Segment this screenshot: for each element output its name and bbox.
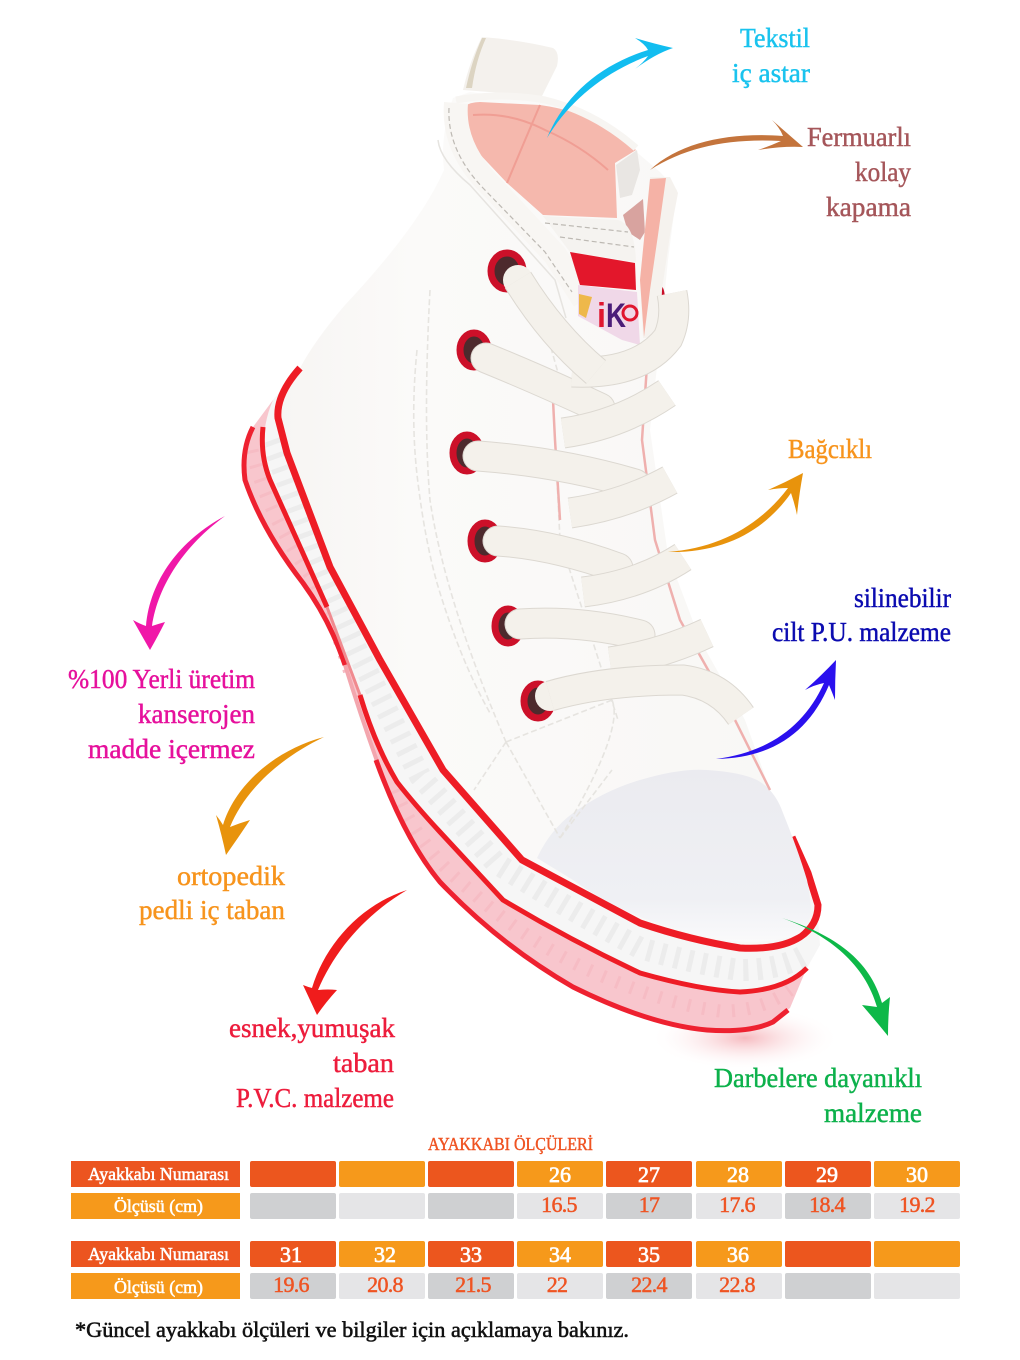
label: orthopedic	[139, 861, 286, 925]
tongue	[543, 216, 636, 262]
collar rim	[456, 96, 636, 148]
size cells first table: 30	[906, 1162, 928, 1187]
size cells second table: 34	[549, 1242, 571, 1267]
label: textile lining	[732, 23, 810, 88]
rear eyelet	[657, 286, 665, 314]
label: textile lining: Tekstil	[740, 23, 810, 53]
size cells second table: 22	[547, 1272, 567, 1297]
size cells first table: 29	[816, 1162, 838, 1187]
eyelets	[453, 253, 552, 718]
tongue stitches	[545, 223, 634, 247]
row labels: Ölçüsü (cm)	[114, 1196, 203, 1217]
collar stitches	[449, 108, 572, 292]
red foxing stripe	[278, 368, 818, 948]
label: flexible sole: P.V.C. malzeme	[236, 1083, 394, 1113]
tongue logo: K	[606, 297, 626, 335]
label: flexible sole	[229, 1013, 395, 1113]
arrow: insole orange	[216, 737, 324, 855]
arrow: lining cyan	[547, 38, 673, 138]
size cells first table: 19.2	[899, 1192, 935, 1217]
toe cap	[537, 770, 811, 942]
lining folds	[473, 105, 608, 183]
size cells first table	[250, 1161, 960, 1219]
size cells second table: 31	[280, 1242, 302, 1267]
row labels	[71, 1161, 240, 1299]
laces	[478, 265, 741, 716]
size cells second table: 20.8	[367, 1272, 404, 1297]
label: impact resistant: malzeme	[824, 1098, 922, 1128]
collar band	[456, 103, 584, 300]
zipper pull	[623, 199, 645, 240]
pull tab	[463, 37, 558, 96]
label: textile lining: iç astar	[732, 58, 810, 88]
label: impact resistant: Darbelere dayanıklı	[714, 1063, 922, 1093]
pink eyestay edge	[553, 350, 770, 790]
flap lining	[640, 178, 666, 337]
label: laces: Bağcıklı	[788, 434, 872, 464]
tongue logo: i	[597, 297, 606, 335]
size cells second table: 35	[638, 1242, 660, 1267]
table title: AYAKKABI ÖLÇÜLERİ	[428, 1134, 593, 1154]
size cells second table: 32	[374, 1242, 396, 1267]
zipper	[616, 150, 640, 198]
size cells first table: 26	[549, 1162, 571, 1187]
arrow: toe green	[782, 918, 890, 1036]
size cells second table: 22.4	[631, 1272, 668, 1297]
midsole ribs	[272, 440, 805, 970]
label: flexible sole: taban	[333, 1048, 395, 1078]
row labels: Ölçüsü (cm)	[114, 1277, 203, 1298]
size cells second table	[250, 1241, 960, 1299]
sole texture	[252, 450, 790, 1011]
outer sole red edge	[244, 427, 788, 1031]
arrow: PU blue	[716, 660, 836, 759]
size cells first table: 28	[727, 1162, 749, 1187]
label: local production: madde içermez	[88, 734, 255, 764]
label: local production: %100 Yerli üretim	[68, 664, 255, 694]
middle stripe pale part	[327, 607, 360, 695]
arrow: magenta	[133, 516, 225, 650]
size cells first table: 17	[639, 1192, 660, 1217]
pull tab fold	[466, 38, 486, 88]
label: PU material: silinebilir	[854, 583, 951, 613]
size table	[71, 1134, 960, 1299]
pink outer sole	[244, 400, 808, 1031]
tongue label	[578, 285, 640, 345]
size cells second table: 22.8	[719, 1272, 756, 1297]
seams	[414, 290, 618, 838]
size cells first table: 16.5	[541, 1192, 578, 1217]
row labels: Ayakkabı Numarası	[88, 1164, 229, 1184]
size cells first table: 17.6	[719, 1192, 756, 1217]
row labels: Ayakkabı Numarası	[88, 1244, 229, 1264]
outer sole pale edge	[345, 665, 382, 775]
white midsole	[263, 368, 820, 992]
size cells second table: 36	[727, 1242, 749, 1267]
size cells first table: 18.4	[809, 1192, 846, 1217]
label: impact resistant	[714, 1063, 922, 1128]
footnote: *Güncel ayakkabı ölçüleri ve bilgiler için açıklamaya bakınız.	[75, 1317, 629, 1342]
label: zipper: kolay	[855, 157, 911, 187]
label: PU material: cilt P.U. malzeme	[772, 617, 951, 647]
label: zipper: kapama	[826, 192, 911, 222]
middle red stripe	[262, 427, 807, 992]
label: local production	[68, 664, 255, 764]
size cells first table: 27	[638, 1162, 660, 1187]
size cells second table: 33	[460, 1242, 482, 1267]
label: PU material	[772, 583, 951, 647]
pink lining	[463, 102, 636, 218]
label: flexible sole: esnek,yumuşak	[229, 1013, 395, 1043]
collar edge	[438, 140, 566, 318]
tongue red band	[570, 252, 636, 290]
size cells second table: 21.5	[455, 1272, 492, 1297]
label: orthopedic: ortopedik	[177, 861, 286, 891]
arrow: laces orange	[668, 473, 803, 552]
label: orthopedic: pedli iç taban	[139, 895, 285, 925]
floor shadow	[650, 1006, 840, 1070]
shoe illustration	[244, 37, 840, 1070]
size cells second table: 19.6	[273, 1272, 310, 1297]
arrow: zipper brown	[650, 120, 803, 170]
zipper flap	[640, 177, 678, 338]
arrow: sole red	[303, 890, 407, 1015]
label: local production: kanserojen	[138, 699, 255, 729]
shoe upper	[278, 92, 818, 948]
label: zipper	[807, 122, 911, 222]
label: zipper: Fermuarlı	[807, 122, 911, 152]
tongue logo	[579, 294, 637, 335]
